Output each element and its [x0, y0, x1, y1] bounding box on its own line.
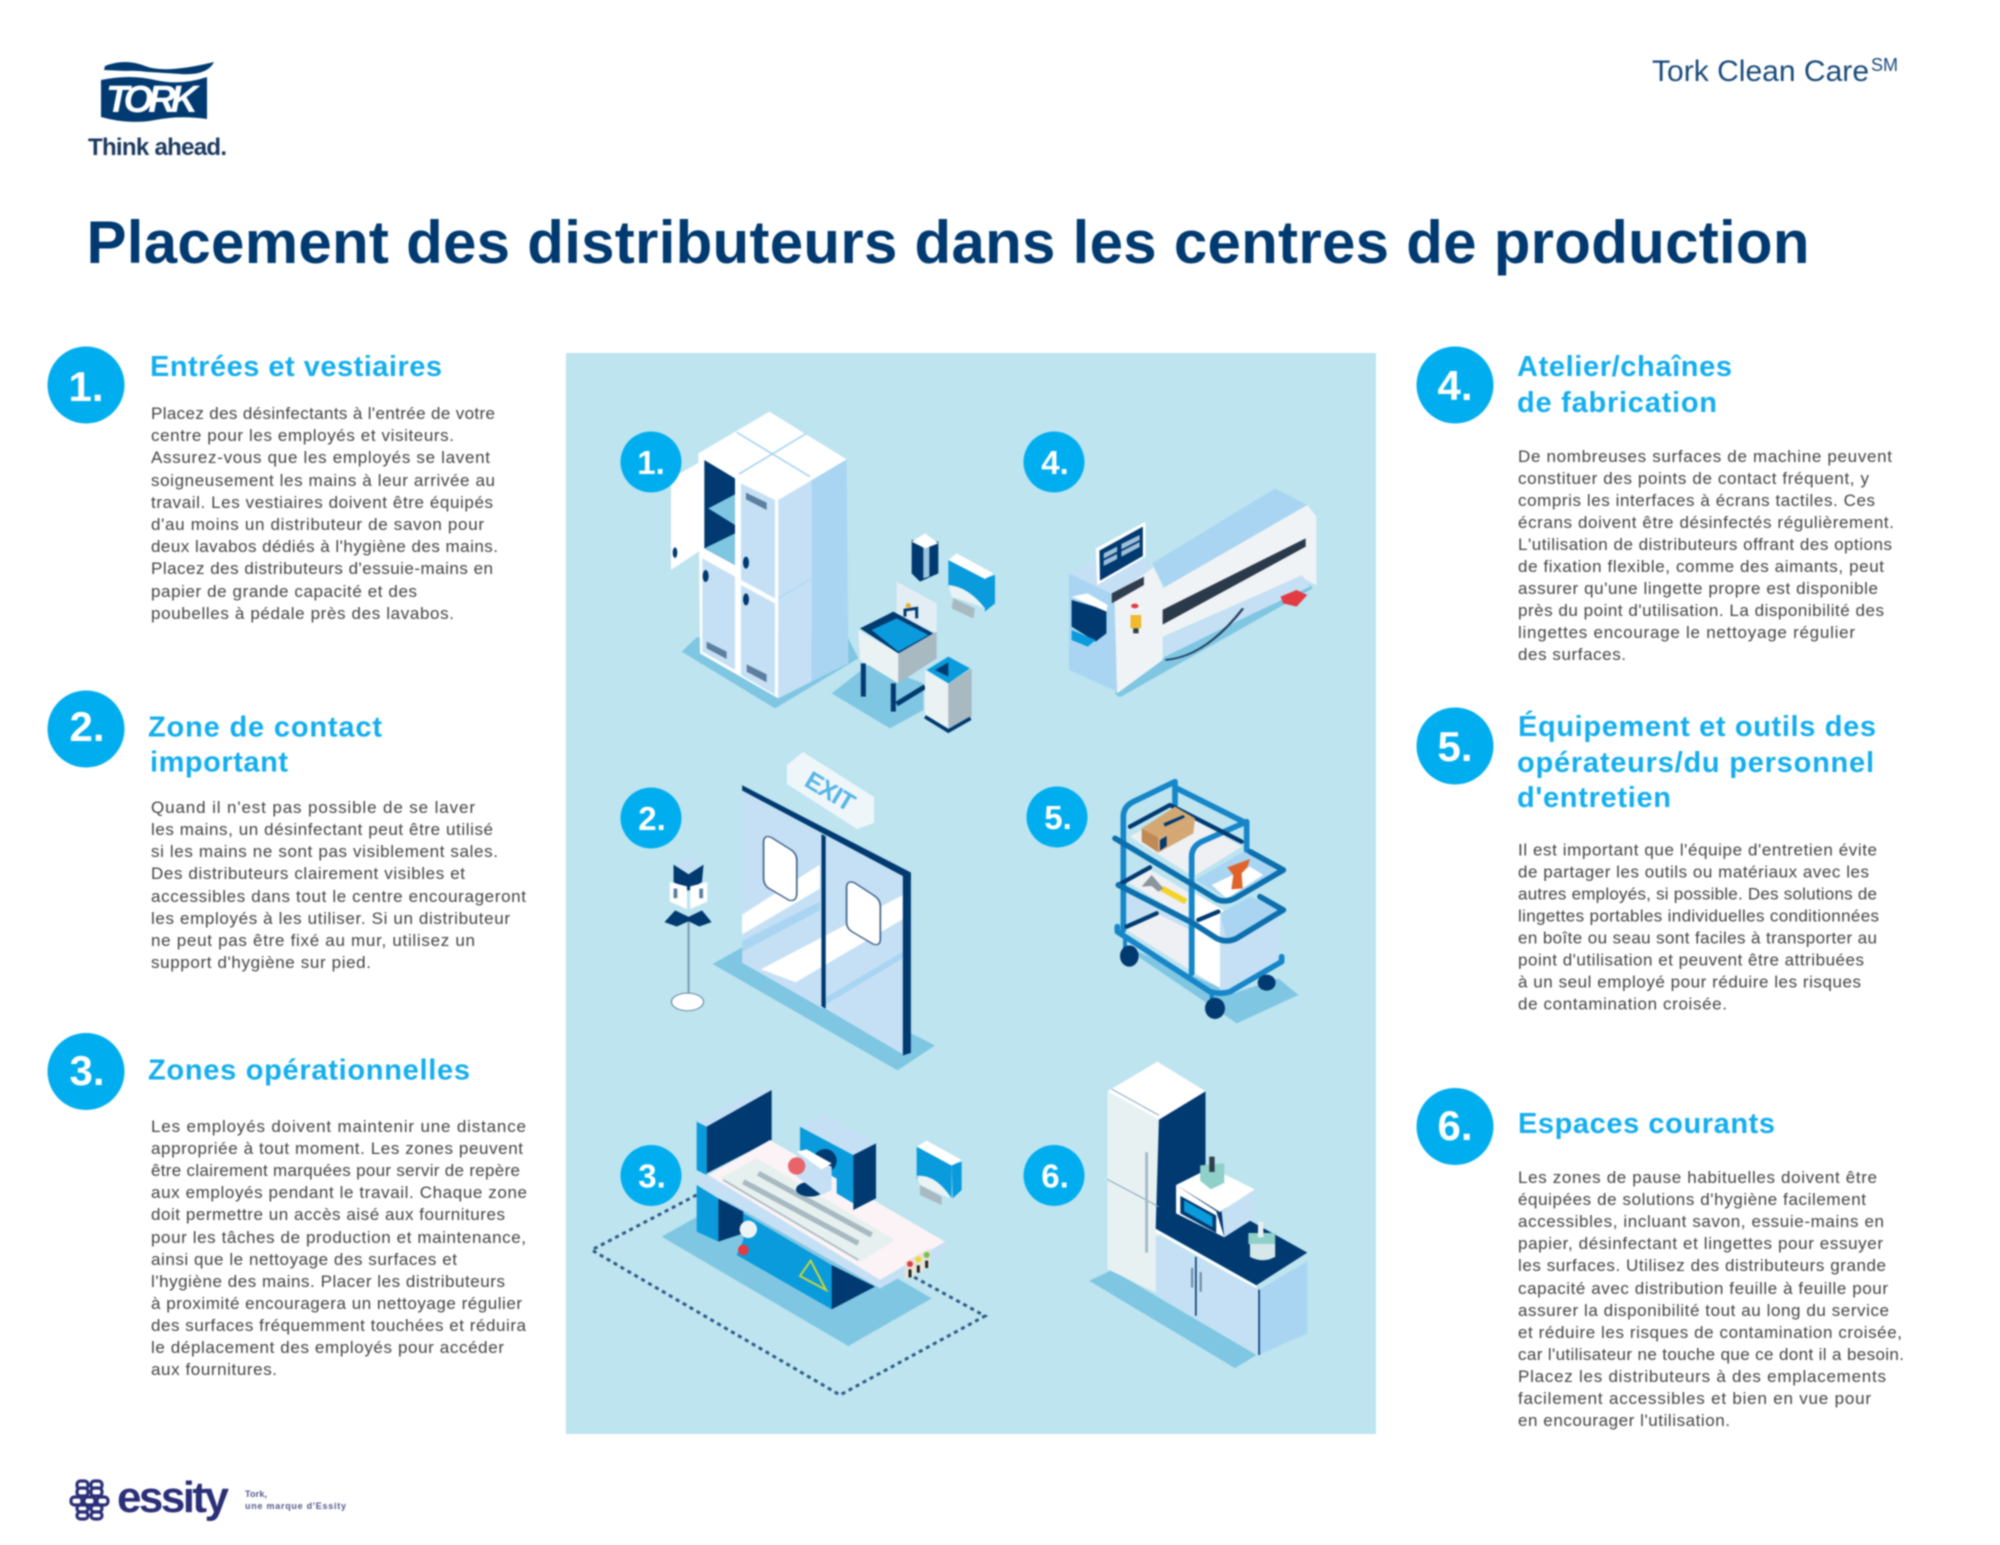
- section 3 body text: Les employés doivent maintenir une distance: [151, 1117, 526, 1136]
- Essity logo: une marque d'Essity: [245, 1501, 346, 1511]
- panel number badges: 5.: [1044, 799, 1072, 836]
- icon: Essity flower: [71, 1481, 108, 1519]
- section 5: Équipement et outils: 5.: [1437, 723, 1473, 770]
- control panel: [1112, 577, 1144, 633]
- section 1 body text: d'au moins un distributeur de savon pour: [151, 515, 484, 534]
- Tork logo: [88, 62, 227, 161]
- section 3 body text: [151, 1117, 527, 1379]
- section 6 body text: Les zones de pause habituelles doivent être: [1518, 1168, 1877, 1187]
- wash basin: [832, 582, 937, 728]
- section 2 body text: les mains, un désinfectant peut être utilisé: [151, 820, 493, 839]
- section 1: Entrées et vestiaires: Entrées et vestiaires: [150, 351, 442, 383]
- section 4 body text: assurer qu'une lingette propre est disponible: [1518, 579, 1878, 598]
- section 4: Atelier/chaînes de fabrication: de fabrication: [1517, 387, 1717, 419]
- Essity logo: Tork,: [245, 1489, 267, 1499]
- section 4 body text: compris les interfaces à écrans tactiles. Ces: [1518, 491, 1875, 510]
- wipes dispenser on microwave: [1200, 1157, 1224, 1189]
- pedal bin: [925, 657, 972, 731]
- section 4: Atelier/chaînes de fabrication: [1416, 346, 1894, 664]
- wall towel dispenser: [917, 1141, 962, 1205]
- section 5: Équipement et outils: Équipement et outils des: [1518, 709, 1876, 743]
- section 1 body text: Placez des distributeurs d'essuie-mains en: [151, 559, 493, 578]
- panel number badges: 4.: [1041, 444, 1069, 481]
- section 4 body text: des surfaces.: [1518, 645, 1626, 664]
- section 5 body text: [1518, 840, 1879, 1014]
- section 5 body text: autres employés, si possible. Des solutions de: [1518, 884, 1877, 904]
- section 4 body text: De nombreuses surfaces de machine peuvent: [1518, 447, 1892, 466]
- touch screen: [1096, 522, 1146, 585]
- cardboard box: [1142, 807, 1195, 853]
- section 6 body text: Placez les distributeurs à des emplacements: [1518, 1367, 1886, 1386]
- gantry back face: [800, 1127, 853, 1203]
- drill: [1227, 859, 1250, 889]
- exit sign: EXIT: [800, 766, 860, 817]
- panel number badges: [620, 432, 1088, 1206]
- section 1 body text: Assurez-vous que les employés se lavent: [151, 448, 490, 467]
- brand label: Tork Clean Care: Tork Clean Care: [1652, 55, 1869, 88]
- section 3 body text: doit permettre un accès aisé aux fournitures: [151, 1205, 505, 1224]
- section 5 body text: à un seul employé pour réduire les risques: [1518, 972, 1861, 992]
- section 2 body text: accessibles dans tout le centre encourageront: [151, 887, 526, 906]
- section 5 body text: lingettes portables individuelles conditionnées: [1518, 906, 1879, 926]
- section 2: Zone de contact important: 2.: [69, 703, 105, 750]
- section 4 body text: écrans doivent être désinfectés régulièrement.: [1518, 513, 1894, 532]
- section 2 body text: support d'hygiène sur pied.: [151, 953, 371, 972]
- section 4 body text: lingettes encourage le nettoyage régulier: [1518, 623, 1855, 642]
- illustration panel: [566, 353, 1376, 1434]
- section 4 body text: L'utilisation de distributeurs offrant des options: [1518, 535, 1892, 554]
- paper towel dispenser: [948, 553, 995, 618]
- control strip: [905, 1248, 930, 1280]
- section 4 body text: constituer des points de contact fréquent, y: [1518, 469, 1870, 488]
- panel number badges: 1.: [637, 444, 665, 481]
- brand label: Tork Clean Care: SM: [1871, 55, 1898, 75]
- section 3 body text: des surfaces fréquemment touchées et réduira: [151, 1316, 527, 1335]
- section 3 body text: à proximité encouragera un nettoyage régulier: [151, 1294, 522, 1313]
- section 1 body text: travail. Les vestiaires doivent être équipés: [151, 493, 493, 512]
- section 6 body text: papier, désinfectant et lingettes pour essuyer: [1518, 1234, 1883, 1253]
- section 3 body text: être clairement marquées pour servir de repère: [151, 1161, 520, 1180]
- work table: [697, 1140, 946, 1288]
- section 1 body text: deux lavabos dédiés à l'hygiène des mains.: [151, 537, 498, 556]
- section 6 body text: en encourager l'utilisation.: [1518, 1411, 1730, 1430]
- section 2 body text: Quand il n'est pas possible de se laver: [151, 798, 475, 817]
- microwave: [1176, 1168, 1255, 1237]
- title: Placement des distributeurs dans les centres de production: [86, 209, 1810, 276]
- section 4: Atelier/chaînes de fabrication: 4.: [1437, 362, 1473, 409]
- panel number badges: 6.: [1041, 1158, 1069, 1194]
- Essity logo: [71, 1473, 346, 1522]
- section 2: Zone de contact important: Zone de contact: [148, 712, 382, 744]
- section 1 body text: poubelles à pédale près des lavabos.: [151, 604, 454, 623]
- hammer: [1142, 875, 1186, 902]
- section 5 body text: Il est important que l'équipe d'entretien évite: [1518, 840, 1877, 860]
- illustration 1: lockers and wash basin: [671, 412, 995, 731]
- section 5 body text: de partager les outils ou matériaux avec les: [1518, 862, 1869, 882]
- section 6 body text: [1518, 1168, 1904, 1430]
- wipes tub on counter: [1248, 1222, 1275, 1260]
- section 1 body text: [151, 404, 498, 623]
- section 6 body text: accessibles, incluant savon, essuie-mains en: [1518, 1212, 1884, 1231]
- hand sanitiser stand: [664, 858, 712, 1011]
- section 1: Entrées et vestiaires: 1.: [68, 363, 104, 410]
- section 5: Équipement et outils: d'entretien: [1517, 782, 1671, 814]
- section 3: Zones opérationnelles: 3.: [69, 1047, 105, 1094]
- dispenser on machine: [1072, 593, 1107, 647]
- section 1 body text: centre pour les employés et visiteurs.: [151, 426, 454, 445]
- section 5 body text: point d'utilisation et peuvent être attribuées: [1518, 950, 1864, 970]
- section 3 body text: ainsi que le nettoyage des surfaces et: [151, 1250, 457, 1269]
- illustration 2: exit doors and hand hygiene stand: [664, 785, 935, 1070]
- section 6 body text: facilement accessibles et bien en vue pour: [1518, 1389, 1871, 1408]
- section 4 body text: près du point d'utilisation. La disponibilité des: [1518, 601, 1884, 620]
- panel number badges: 2.: [638, 800, 666, 837]
- section 2 body text: si les mains ne sont pas visiblement sales.: [151, 842, 498, 861]
- section 2 body text: [151, 798, 526, 972]
- section 3 body text: aux fournitures.: [151, 1360, 277, 1379]
- section 6 body text: et réduire les risques de contamination croisée,: [1518, 1323, 1902, 1342]
- illustration 5: tool cart: [1115, 782, 1298, 1023]
- illustration 6: fridge and kitchenette: [1089, 1062, 1307, 1368]
- section 4 body text: [1518, 447, 1894, 664]
- section 6 body text: équipées de solutions d'hygiène facilement: [1518, 1190, 1866, 1209]
- section 3 body text: le déplacement des employés pour accéder: [151, 1338, 504, 1357]
- section 5: Équipement et outils: opérateurs/du personnel: [1517, 747, 1874, 779]
- section 2: Zone de contact important: important: [150, 746, 288, 778]
- section 2 body text: ne peut pas être fixé au mur, utilisez un: [151, 931, 475, 950]
- section 6: Espaces courants: 6.: [1437, 1102, 1473, 1149]
- section 6 body text: assurer la disponibilité tout au long du service: [1518, 1301, 1889, 1320]
- section 3 body text: aux employés pendant le travail. Chaque zone: [151, 1183, 527, 1202]
- section 3 body text: l'hygiène des mains. Placer les distributeurs: [151, 1272, 505, 1291]
- section 6 body text: les surfaces. Utilisez des distributeurs grande: [1518, 1256, 1886, 1275]
- section 6 body text: car l'utilisateur ne touche que ce dont il a besoin.: [1518, 1345, 1904, 1364]
- section 1 body text: soigneusement les mains à leur arrivée au: [151, 471, 495, 490]
- section 2 body text: les employés à les utiliser. Si un distributeur: [151, 909, 510, 928]
- section 2: Zone de contact important: [48, 690, 526, 972]
- section 6 body text: capacité avec distribution feuille à feuille pour: [1518, 1279, 1888, 1298]
- section 5 body text: de contamination croisée.: [1518, 994, 1727, 1014]
- section 6: Espaces courants: [1416, 1088, 1904, 1430]
- section 3 body text: appropriée à tout moment. Les zones peuvent: [151, 1139, 523, 1158]
- section 3 body text: pour les tâches de production et maintenance,: [151, 1228, 526, 1247]
- section 1: Entrées et vestiaires: [48, 346, 498, 623]
- section 4 body text: de fixation flexible, comme des aimants, peut: [1518, 557, 1884, 576]
- section 1 body text: papier de grande capacité et des: [151, 582, 417, 601]
- soap dispenser: [912, 533, 938, 582]
- panel number badges: 3.: [638, 1158, 666, 1194]
- exit sign: [787, 752, 874, 829]
- section 1 body text: Placez des désinfectants à l'entrée de votre: [151, 404, 495, 423]
- tagline: Think ahead.: [88, 134, 227, 161]
- section 5 body text: en boîte ou seau sont faciles à transporter au: [1518, 928, 1877, 948]
- section 6: Espaces courants: Espaces courants: [1518, 1108, 1775, 1140]
- section 3: Zones opérationnelles: Zones opérationnelles: [148, 1054, 470, 1086]
- illustration 3: operational machine zone: [592, 1088, 985, 1395]
- Tork logo: TORK: [106, 79, 201, 121]
- Essity logo: essity: [117, 1473, 230, 1522]
- section 2 body text: Des distributeurs clairement visibles et: [151, 864, 465, 883]
- illustration 4: production line: [1069, 488, 1316, 697]
- section 4: Atelier/chaînes de fabrication: Atelier/chaînes: [1517, 351, 1732, 383]
- section 5: Équipement et outils: [1416, 708, 1879, 1014]
- section 3: Zones opérationnelles: [48, 1033, 527, 1379]
